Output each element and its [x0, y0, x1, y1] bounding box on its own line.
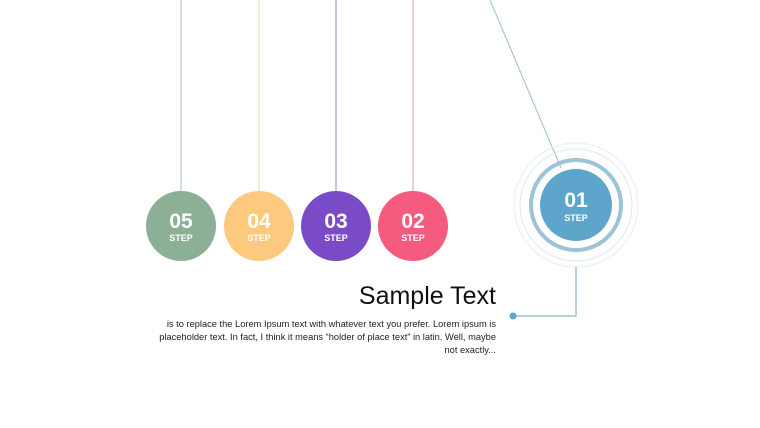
connector	[510, 267, 576, 320]
step 05	[146, 191, 216, 261]
heading: Sample Text	[359, 282, 496, 310]
step 03	[301, 191, 371, 261]
step 02	[378, 191, 448, 261]
step 04: STEP	[247, 233, 271, 243]
step 03: 03	[324, 210, 348, 233]
body text: not exactly...	[444, 345, 496, 355]
hanging lines	[181, 0, 561, 191]
step 04	[224, 191, 294, 261]
step 02: STEP	[401, 233, 425, 243]
body text: placeholder text. In fact, I think it means “holder of place text” in latin. Well, maybe	[159, 332, 496, 342]
step 03: STEP	[324, 233, 348, 243]
step 02: 02	[401, 210, 425, 233]
body text: is to replace the Lorem Ipsum text with whatever text you prefer. Lorem ipsum is	[167, 319, 496, 329]
step 05: 05	[169, 210, 193, 233]
step 01: STEP	[564, 213, 588, 223]
step 05: STEP	[169, 233, 193, 243]
step 01: 01	[564, 189, 588, 212]
step 04: 04	[247, 210, 271, 233]
step 01	[514, 143, 638, 267]
body text	[159, 319, 496, 355]
